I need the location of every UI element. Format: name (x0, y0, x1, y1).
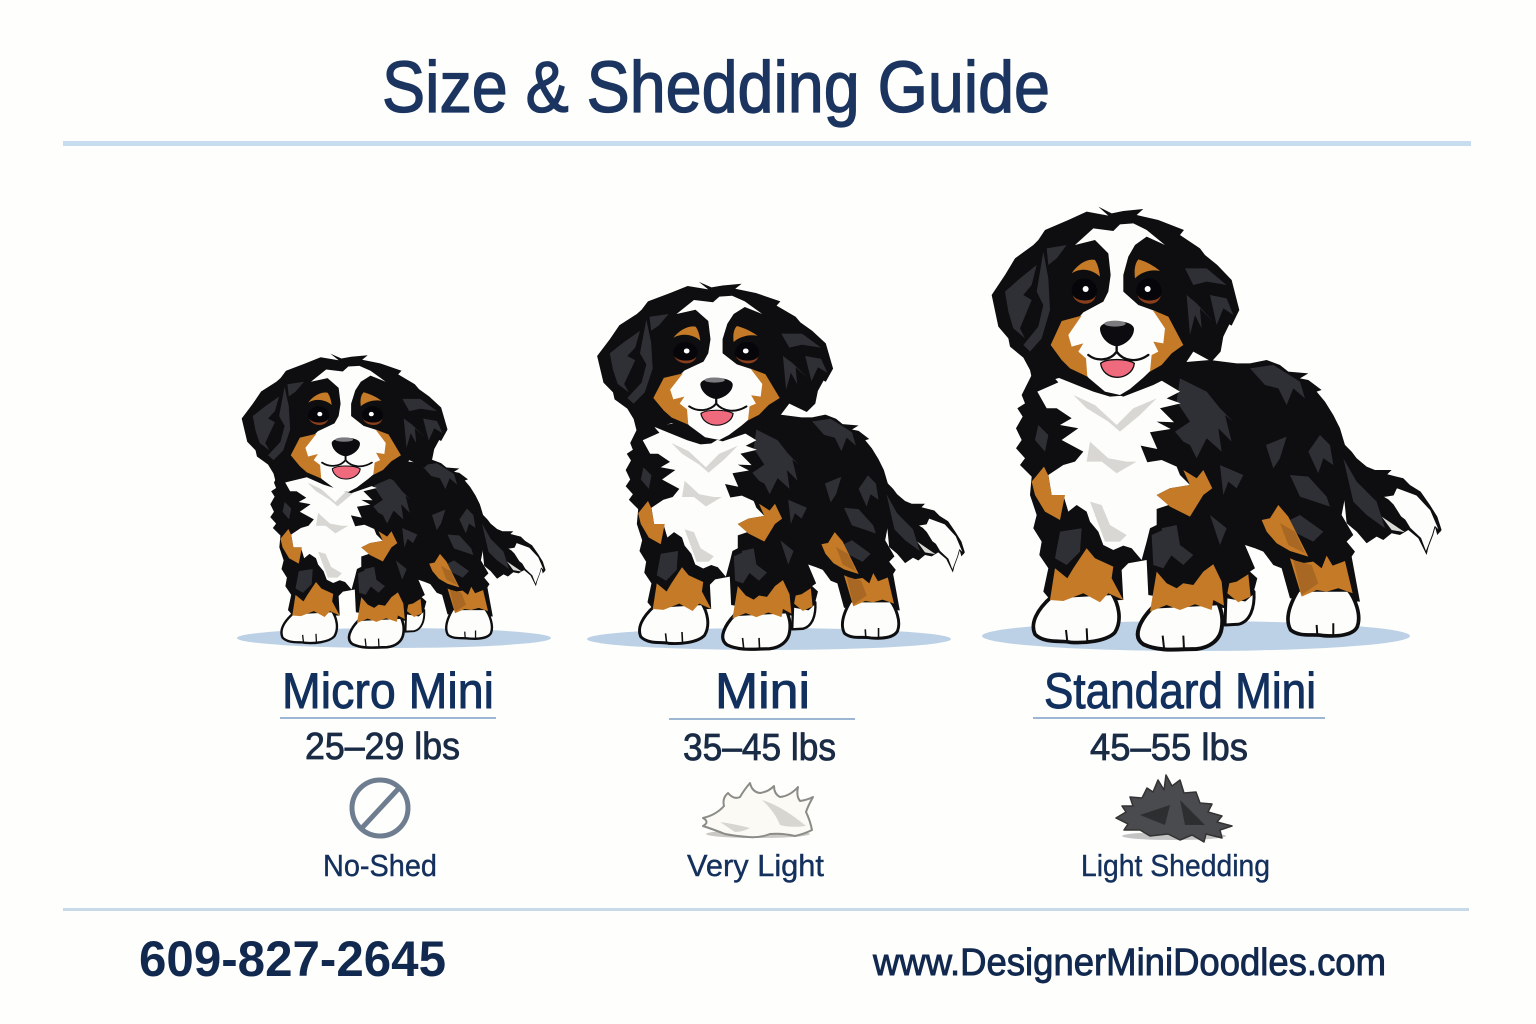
icon: dark fur tuft (1116, 775, 1232, 842)
illustration: standard mini puppy (992, 207, 1442, 650)
icon: white fur tuft (703, 783, 813, 838)
panel: micro mini (237, 354, 551, 883)
panel: mini (587, 282, 965, 883)
weight range: 45–55 lbs (1090, 727, 1248, 769)
ground shadow (587, 628, 951, 650)
contact: website: www.DesignerMiniDoodles.com (872, 942, 1386, 984)
shedding label: Very Light (687, 848, 824, 883)
size name: Micro Mini (282, 663, 494, 719)
size name: Standard Mini (1044, 663, 1316, 719)
ground shadow (982, 621, 1410, 651)
contact: phone number: 609-827-2645 (139, 931, 446, 987)
weight range: 25–29 lbs (305, 726, 460, 768)
illustration: mini puppy (597, 282, 965, 649)
title: Size & Shedding Guide (382, 48, 1050, 128)
illustration: micro mini puppy (242, 354, 546, 648)
shedding label: No-Shed (323, 848, 437, 883)
weight range: 35–45 lbs (683, 727, 836, 769)
icon: no-shed symbol (352, 780, 408, 836)
size name: Mini (715, 663, 810, 719)
ground shadow (237, 628, 551, 648)
panel: standard mini (982, 207, 1442, 883)
shedding label: Light Shedding (1081, 848, 1270, 883)
